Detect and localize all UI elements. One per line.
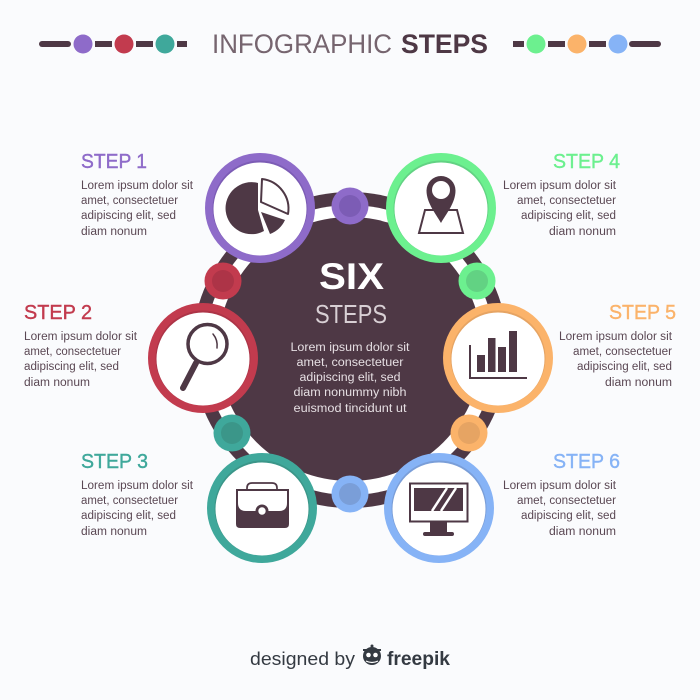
step 4 body: diam nonum [549,226,616,238]
central paragraph: Lorem ipsum dolor sit [290,342,410,354]
step 4 body [503,180,617,238]
step 2 body: amet, consectetuer [24,346,121,358]
step 1 body: amet, consectetuer [81,195,178,207]
step 5 body: amet, consectetuer [573,346,672,358]
connector dot: green [458,262,496,300]
connector dot: teal [214,414,250,452]
step 2 body: Lorem ipsum dolor sit [24,331,138,343]
central paragraph: diam nonummy nibh [294,387,406,399]
step 6 body: adipiscing elit, sed [521,510,616,522]
icon: pie chart [226,179,288,234]
connector dot: purple [332,188,368,224]
step 6 body: Lorem ipsum dolor sit [503,480,617,492]
step 1 text [81,151,194,238]
step 6 body: amet, consectetuer [517,495,616,507]
step 6 body [503,480,617,538]
step 5 body: Lorem ipsum dolor sit [559,331,673,343]
step 5 heading: STEP 5 [609,302,676,324]
step 4 text [503,151,620,238]
central paragraph: adipiscing elit, sed [300,372,400,384]
step 1 body: diam nonum [81,226,147,238]
step 2 body: adipiscing elit, sed [24,361,119,373]
heading: STEPS: STEPS [315,299,387,329]
step 5 body: diam nonum [605,377,672,389]
step 1 heading: STEP 1 [81,151,147,173]
step 4 heading: STEP 4 [553,151,620,173]
step 3 body: amet, consectetuer [81,495,178,507]
connector dot: orange [450,414,488,452]
footer: designed by: designed by [250,649,355,669]
step 2 text [24,302,138,389]
step 1 body: adipiscing elit, sed [81,210,176,222]
header: right dotted line [513,34,661,54]
title: bold word: STEPS [401,29,488,59]
step 1 body: Lorem ipsum dolor sit [81,180,194,192]
circle: step 6 monitor [384,453,494,563]
step 1 body [81,180,194,238]
central paragraph: amet, consectetuer [296,357,404,369]
step 4 body: amet, consectetuer [517,195,616,207]
step 5 text [559,302,676,389]
step 3 body [81,480,194,538]
step 3 body: diam nonum [81,526,147,538]
step 2 heading: STEP 2 [24,302,92,324]
icon: freepik mascot [363,644,381,665]
central diagram ring [192,192,508,508]
central paragraph: euismod tincidunt ut [294,403,407,415]
step 5 body: adipiscing elit, sed [577,361,672,373]
circle: step 5 bar chart [443,303,553,413]
step 2 body [24,331,138,389]
header: left dotted line [39,34,187,54]
circle: step 4 location pin [386,153,496,263]
footer credit [250,644,450,670]
icon: bar chart [470,331,527,378]
icon: monitor [410,484,468,536]
step 3 heading: STEP 3 [81,451,148,473]
central paragraph [290,342,410,415]
step 3 text [81,451,194,538]
step 4 body: Lorem ipsum dolor sit [503,180,617,192]
step 5 body [559,331,673,389]
circle: step 3 briefcase [207,453,317,563]
step 4 body: adipiscing elit, sed [521,210,616,222]
step 3 body: Lorem ipsum dolor sit [81,480,194,492]
connector dot: blue [332,476,368,512]
circle: step 2 magnifier [148,303,258,413]
circle: step 1 pie chart [205,153,315,263]
connector dot: red [204,262,242,300]
central dark circle with text [218,217,482,481]
icon: map pin [419,176,463,233]
icon: briefcase [236,483,289,528]
footer: freepik: freepik [387,649,450,670]
heading: SIX: SIX [319,256,384,297]
step 6 body: diam nonum [549,526,616,538]
step 6 text [503,451,620,538]
icon: magnifying glass [183,324,227,388]
title: INFOGRAPHIC [212,29,392,59]
step 3 body: adipiscing elit, sed [81,510,176,522]
step 6 heading: STEP 6 [553,451,620,473]
step 2 body: diam nonum [24,377,90,389]
